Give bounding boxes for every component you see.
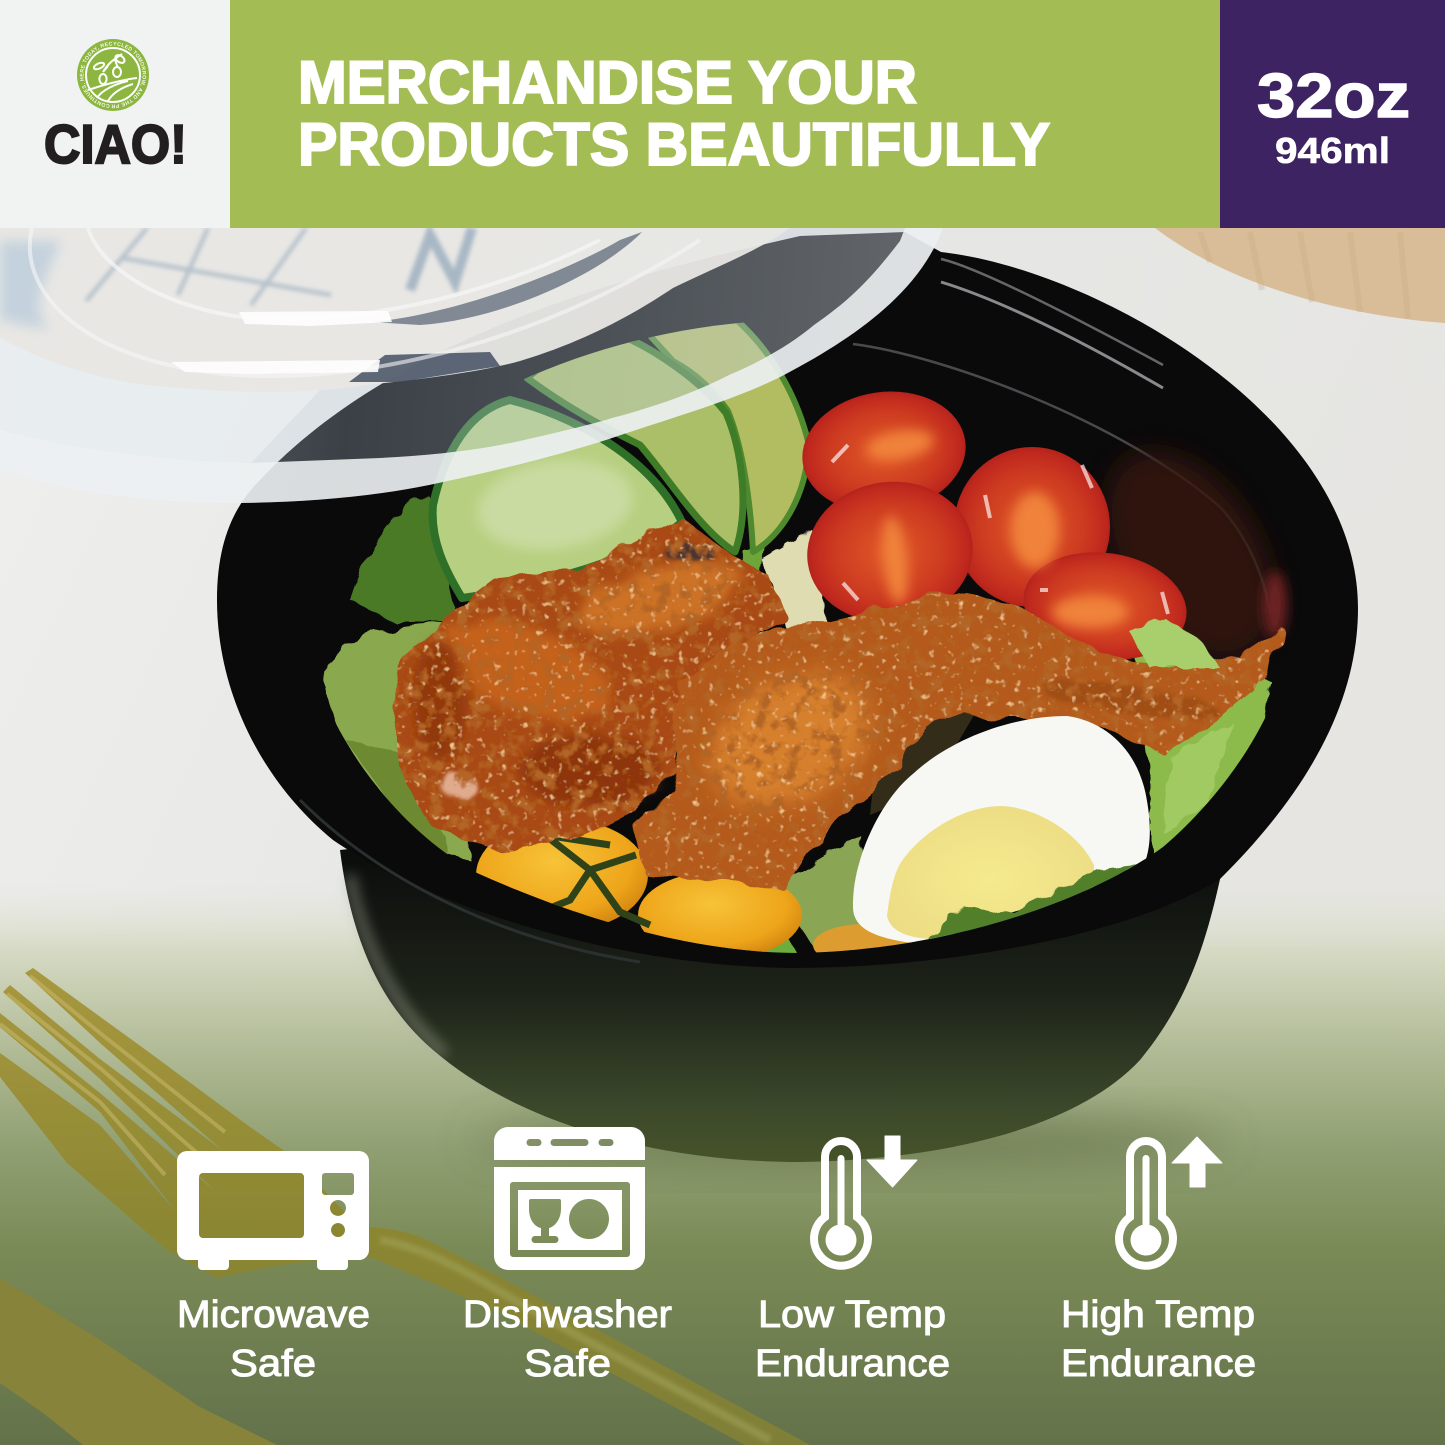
icon: thermometer up xyxy=(1119,1137,1222,1266)
label xyxy=(1061,1294,1256,1385)
label xyxy=(755,1294,950,1385)
header: headline panel xyxy=(230,0,1220,228)
bowl rim xyxy=(217,232,1358,968)
food xyxy=(323,301,1281,966)
lid highlights xyxy=(171,311,392,374)
header: size panel xyxy=(1220,0,1445,228)
lettuce xyxy=(323,497,1270,960)
lettuce small xyxy=(1130,618,1220,668)
chicken wing left xyxy=(398,522,782,847)
size oz: 32oz xyxy=(1257,62,1410,131)
dark gap behind wing xyxy=(870,712,974,815)
gold fork xyxy=(0,968,810,1445)
logo inner ring xyxy=(86,48,140,102)
clear lid xyxy=(0,228,943,503)
label: Safe xyxy=(230,1343,316,1385)
marble seen through lid xyxy=(88,378,319,463)
label xyxy=(177,1294,370,1385)
headline xyxy=(298,49,1050,178)
feature: high temp endurance xyxy=(1061,1137,1256,1385)
lid rim xyxy=(0,228,943,503)
size ml: 946ml xyxy=(1275,130,1390,171)
icon: dish rack xyxy=(518,1190,622,1250)
icon: thermometer down xyxy=(814,1136,917,1266)
bowl body xyxy=(340,849,1220,1162)
logo badge xyxy=(77,39,149,111)
lettuce front xyxy=(928,864,1137,940)
icon: microwave xyxy=(177,1151,369,1270)
egg xyxy=(853,716,1150,945)
brand name: CIAO! xyxy=(44,113,187,175)
logo olive branch xyxy=(88,54,137,101)
header: logo panel xyxy=(0,0,230,228)
bowl shadow xyxy=(470,1116,1230,1164)
label xyxy=(463,1294,672,1385)
icon: dishwasher xyxy=(494,1127,645,1270)
label: Dishwasher xyxy=(463,1294,672,1336)
lid dome xyxy=(100,228,790,392)
feature: low temp endurance xyxy=(755,1136,950,1385)
interior reflection xyxy=(1102,444,1294,660)
label: Low Temp xyxy=(758,1294,946,1336)
lid base xyxy=(242,228,934,503)
gold knife xyxy=(0,1278,277,1445)
feature: dishwasher safe xyxy=(463,1127,672,1385)
rim highlight lines xyxy=(300,259,1270,962)
label: High Temp xyxy=(1061,1294,1255,1336)
label: Endurance xyxy=(755,1343,950,1385)
yellow tomatoes xyxy=(476,826,916,952)
dome reflections xyxy=(30,228,700,382)
dome left tint xyxy=(0,241,61,330)
label: Endurance xyxy=(1061,1343,1256,1385)
wooden board xyxy=(1155,228,1445,323)
tomatoes xyxy=(802,392,1186,660)
label: Safe xyxy=(524,1343,611,1385)
headline: MERCHANDISE YOUR xyxy=(298,49,917,116)
cucumbers xyxy=(433,301,808,598)
headline: PRODUCTS BEAUTIFULLY xyxy=(298,111,1050,178)
chicken wing right xyxy=(637,594,1281,887)
label: Microwave xyxy=(177,1294,370,1336)
feature: microwave safe xyxy=(177,1151,370,1385)
green fade background xyxy=(0,880,1445,1445)
